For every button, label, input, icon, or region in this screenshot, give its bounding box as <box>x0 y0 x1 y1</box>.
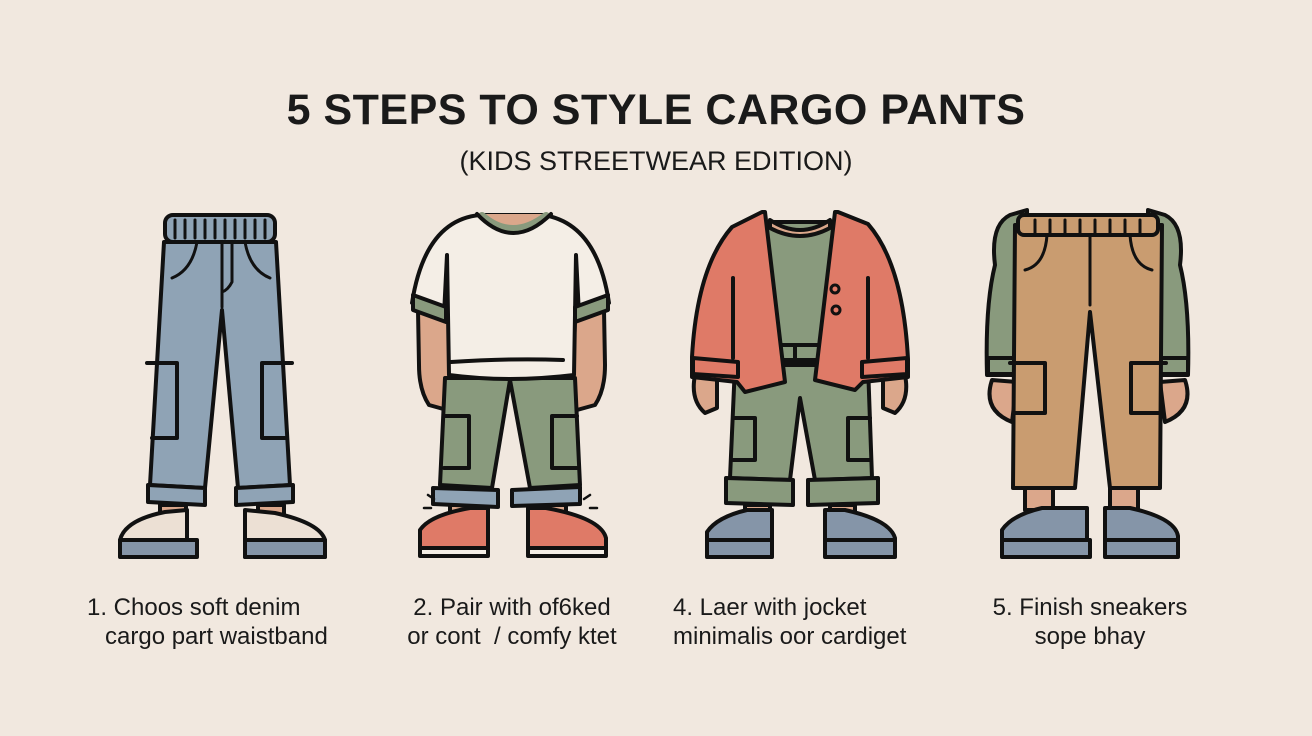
label 4 <box>993 594 1187 650</box>
label 3: 4. Laer with jocket <box>673 594 866 621</box>
label 1: 1. Choos soft denim <box>87 594 300 621</box>
label 2: 2. Pair with of6ked <box>413 594 611 621</box>
label 1: cargo part waistband <box>105 623 328 650</box>
label 1 <box>87 594 328 650</box>
figure 3: jacket layered <box>692 212 908 557</box>
label 4: sope bhay <box>1035 623 1145 650</box>
label 3: minimalis oor cardiget <box>673 623 906 650</box>
label 2: or cont / comfy ktet <box>407 623 617 650</box>
label 4: 5. Finish sneakers <box>993 594 1187 621</box>
figure 2: tee + green cargo <box>412 214 609 556</box>
label 3 <box>673 594 906 650</box>
label 2 <box>407 594 617 650</box>
figure 4: tan cargo + sweater <box>987 210 1188 557</box>
subtitle: (KIDS STREETWEAR EDITION) <box>459 146 853 176</box>
figure 1: blue cargo pants <box>120 215 325 557</box>
title: 5 STEPS TO STYLE CARGO PANTS <box>287 86 1025 134</box>
